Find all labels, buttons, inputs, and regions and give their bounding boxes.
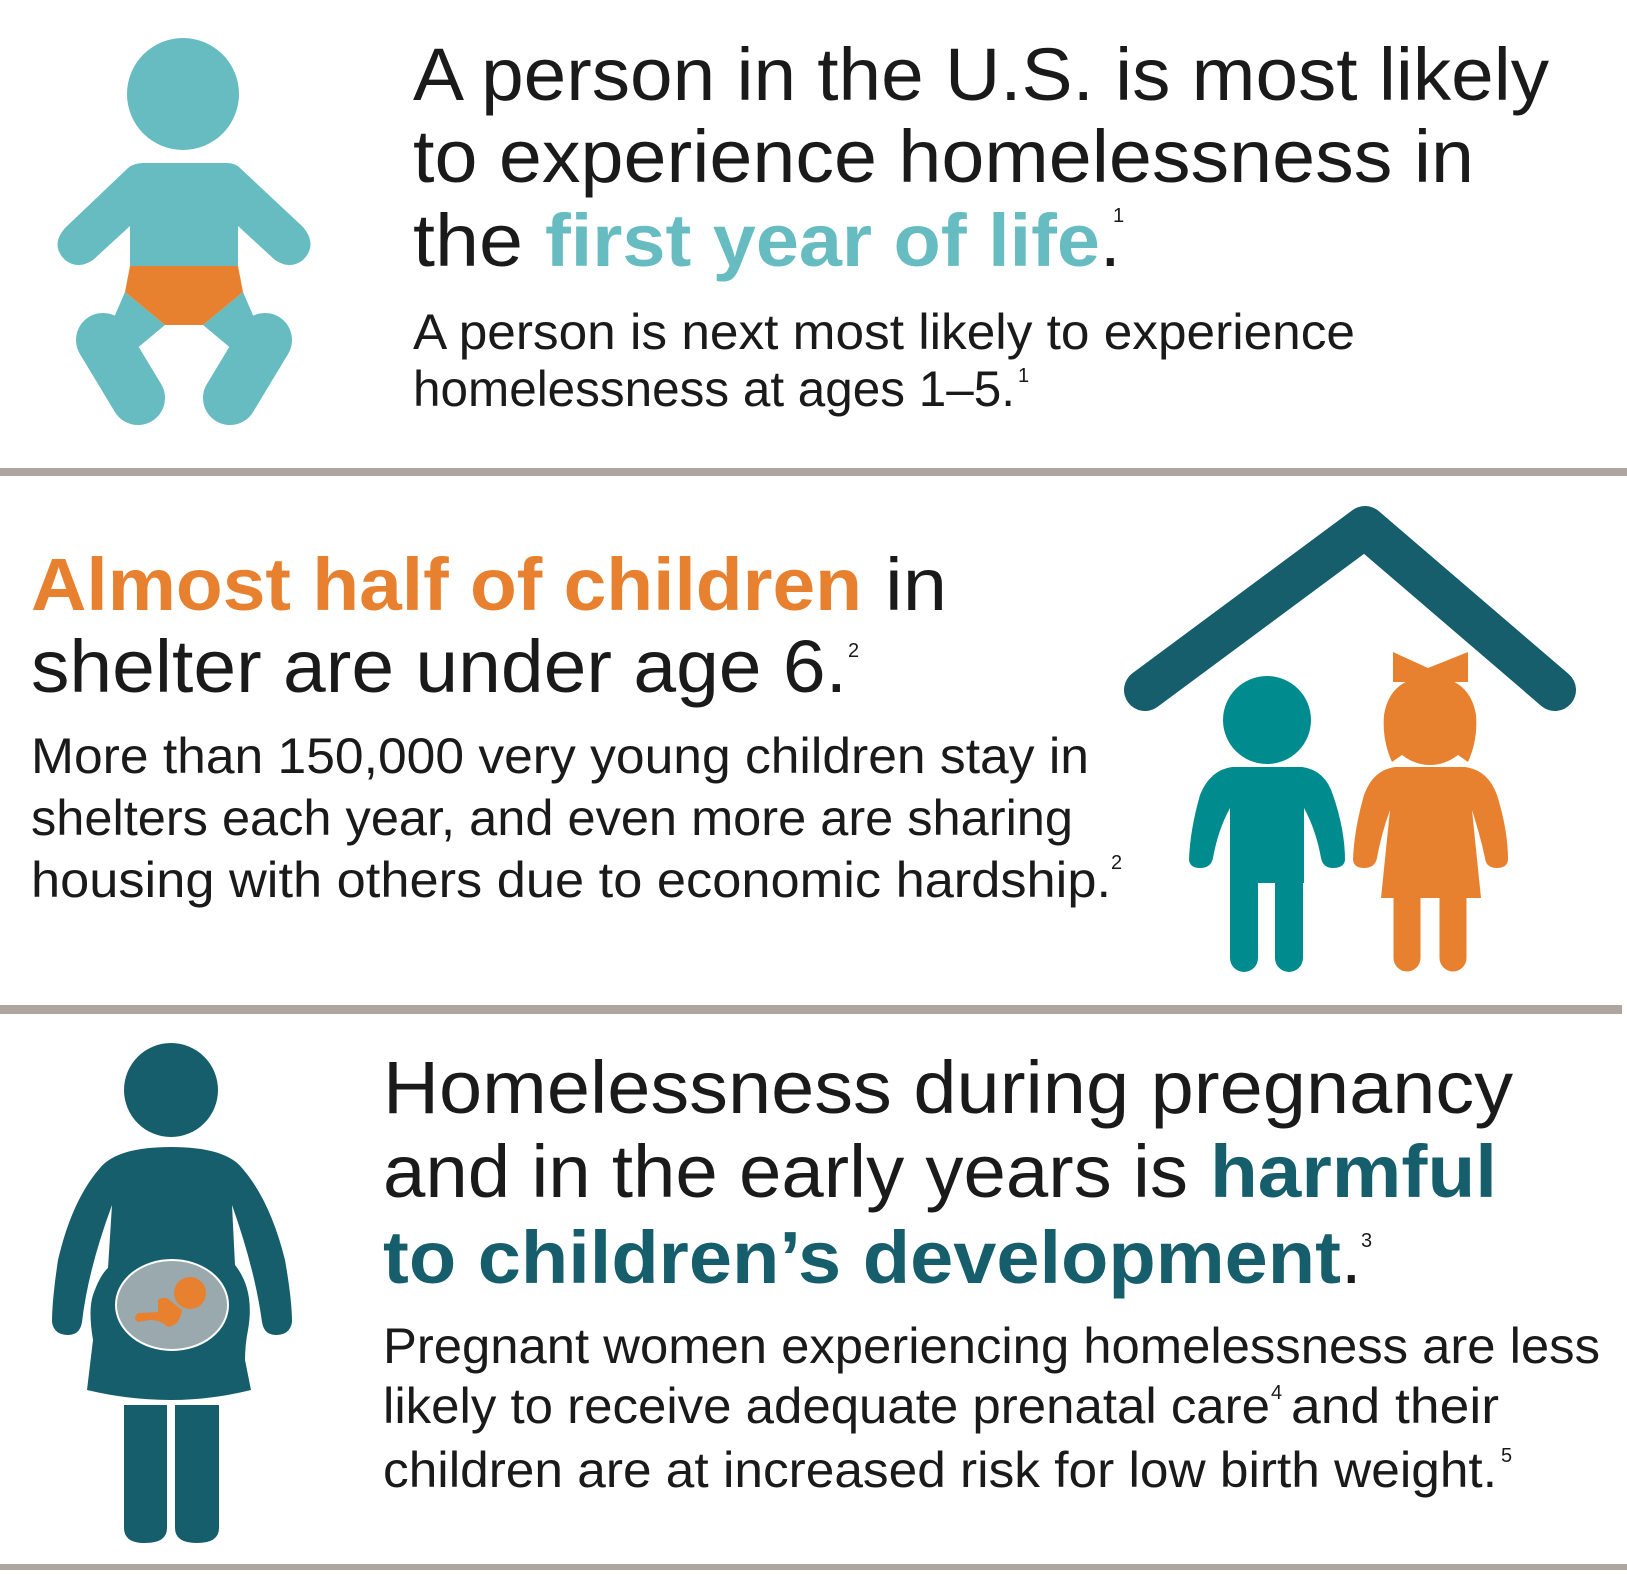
text: section 1 body: 1 bbox=[1018, 365, 1029, 387]
text: section 2 body: 2 bbox=[1111, 852, 1122, 874]
text: section 2 body: More than 150,000 very young children stay in bbox=[31, 728, 1089, 784]
text: section 2 body bbox=[31, 728, 1122, 908]
heading: section 1: . bbox=[1100, 199, 1121, 282]
icon: house with children bbox=[1145, 527, 1555, 958]
text: section 3 body: and their bbox=[1291, 1378, 1499, 1434]
heading: section 3: to children’s development bbox=[383, 1216, 1341, 1299]
text: section 2 body: housing with others due to economic hardship. bbox=[31, 852, 1111, 908]
heading: section 3 bbox=[383, 1046, 1513, 1299]
heading: section 2: in bbox=[885, 543, 947, 626]
heading: section 1: the bbox=[413, 199, 523, 282]
icon: baby bbox=[58, 38, 310, 398]
text: section 1 body: A person is next most likely to experience bbox=[413, 304, 1355, 360]
heading: section 3: harmful bbox=[1210, 1130, 1497, 1213]
text: section 3 body bbox=[383, 1318, 1600, 1498]
heading: section 3: . bbox=[1341, 1216, 1362, 1299]
heading: section 2: Almost half of children bbox=[31, 543, 862, 626]
heading: section 1: to experience homelessness in bbox=[413, 115, 1474, 198]
text: section 3 body: Pregnant women experiencing homelessness are less bbox=[383, 1318, 1600, 1374]
heading: section 2: shelter are under age 6. bbox=[31, 625, 847, 708]
heading: section 2 bbox=[31, 543, 947, 708]
text: section 3 body: 5 bbox=[1501, 1445, 1512, 1467]
heading: section 1: first year of life bbox=[545, 199, 1100, 282]
text: section 3 body: likely to receive adequate prenatal care bbox=[383, 1378, 1270, 1434]
heading: section 2: 2 bbox=[848, 640, 859, 662]
heading: section 3: 3 bbox=[1361, 1230, 1372, 1252]
text: section 1 body: homelessness at ages 1–5. bbox=[413, 361, 1015, 417]
heading: section 1: A person in the U.S. is most likely bbox=[413, 33, 1549, 116]
heading: section 1: 1 bbox=[1113, 205, 1124, 227]
text: section 2 body: shelters each year, and even more are sharing bbox=[31, 790, 1073, 846]
heading: section 1 bbox=[413, 33, 1549, 282]
text: section 1 body bbox=[413, 304, 1355, 417]
text: section 3 body: children are at increased risk for low birth weight. bbox=[383, 1442, 1497, 1498]
icon: pregnant woman bbox=[52, 1043, 292, 1543]
heading: section 3: Homelessness during pregnancy bbox=[383, 1046, 1513, 1129]
divider lines bbox=[0, 468, 1627, 476]
heading: section 3: and in the early years is bbox=[383, 1130, 1188, 1213]
text: section 3 body: 4 bbox=[1271, 1382, 1282, 1404]
